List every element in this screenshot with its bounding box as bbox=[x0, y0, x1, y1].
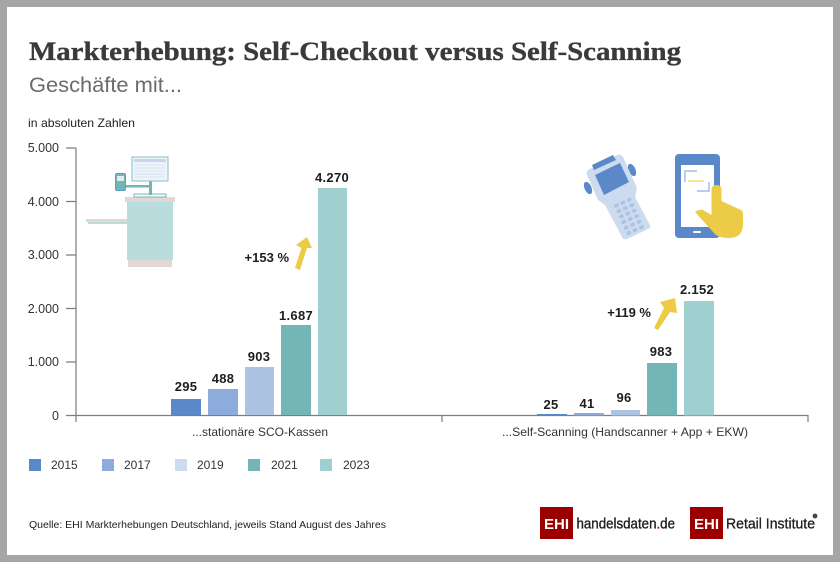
category label right: ...Self-Scanning (Handscanner + App + EKW) bbox=[502, 425, 748, 439]
bar values: stationäre SCO-Kassen: 903 bbox=[248, 349, 270, 364]
legend: 2019 bbox=[197, 458, 224, 472]
axes bbox=[66, 148, 808, 422]
bar values: stationäre SCO-Kassen: 4.270 bbox=[315, 170, 349, 185]
icon: smartphone with hand bbox=[675, 154, 743, 238]
bar values: stationäre SCO-Kassen: 488 bbox=[212, 371, 234, 386]
y axis labels: 5.000 bbox=[28, 141, 59, 155]
logo: EHI handelsdaten.de: handelsdaten.de bbox=[576, 516, 675, 532]
y axis labels: 3.000 bbox=[28, 248, 59, 262]
bars: stationäre SCO-Kassen bbox=[171, 188, 347, 415]
bars: Self-Scanning bbox=[537, 301, 714, 416]
bar values: Self-Scanning: 25 bbox=[543, 397, 559, 412]
bar values: stationäre SCO-Kassen: 1.687 bbox=[279, 308, 313, 323]
y axis labels: 1.000 bbox=[28, 355, 59, 369]
logo: EHI Retail Institute: Retail Institute bbox=[726, 516, 815, 532]
legend: 2015 bbox=[51, 458, 78, 472]
source: Quelle: EHI Markterhebungen Deutschland, jeweils Stand August des Jahres bbox=[29, 519, 386, 531]
legend: 2023 bbox=[343, 458, 370, 472]
bar values: Self-Scanning: 983 bbox=[650, 344, 672, 359]
y axis labels: 4.000 bbox=[28, 195, 59, 209]
icon: checkout terminal bbox=[86, 157, 175, 267]
y axis labels: 0 bbox=[52, 409, 59, 423]
legend: 2017 bbox=[124, 458, 151, 472]
bar values: stationäre SCO-Kassen bbox=[175, 170, 349, 394]
growth label left: +153 % bbox=[245, 250, 289, 265]
bar values: Self-Scanning: 2.152 bbox=[680, 282, 714, 297]
legend bbox=[29, 458, 370, 472]
category label left: ...stationäre SCO-Kassen bbox=[192, 425, 328, 439]
title: Markterhebung: Self-Checkout versus Self-Scanning bbox=[29, 37, 681, 66]
y axis labels: 2.000 bbox=[28, 302, 59, 316]
bar values: Self-Scanning: 96 bbox=[616, 390, 632, 405]
bar values: stationäre SCO-Kassen: 295 bbox=[175, 379, 197, 394]
arrow: growth left bbox=[295, 237, 312, 270]
arrow: growth right bbox=[654, 298, 677, 330]
icon: handscanner bbox=[582, 155, 650, 239]
logo: EHI handelsdaten.de bbox=[540, 507, 675, 539]
bar values: Self-Scanning bbox=[543, 282, 714, 412]
legend: 2021 bbox=[271, 458, 298, 472]
growth label right: +119 % bbox=[607, 305, 651, 320]
bar values: Self-Scanning: 41 bbox=[579, 396, 595, 411]
logo: EHI handelsdaten.de: EHI bbox=[544, 516, 569, 533]
y axis labels bbox=[28, 141, 59, 423]
logo: EHI Retail Institute: EHI bbox=[694, 516, 719, 533]
axis unit label: in absoluten Zahlen bbox=[28, 116, 135, 130]
subtitle: Geschäfte mit... bbox=[29, 74, 182, 97]
logo: EHI Retail Institute bbox=[690, 507, 817, 539]
